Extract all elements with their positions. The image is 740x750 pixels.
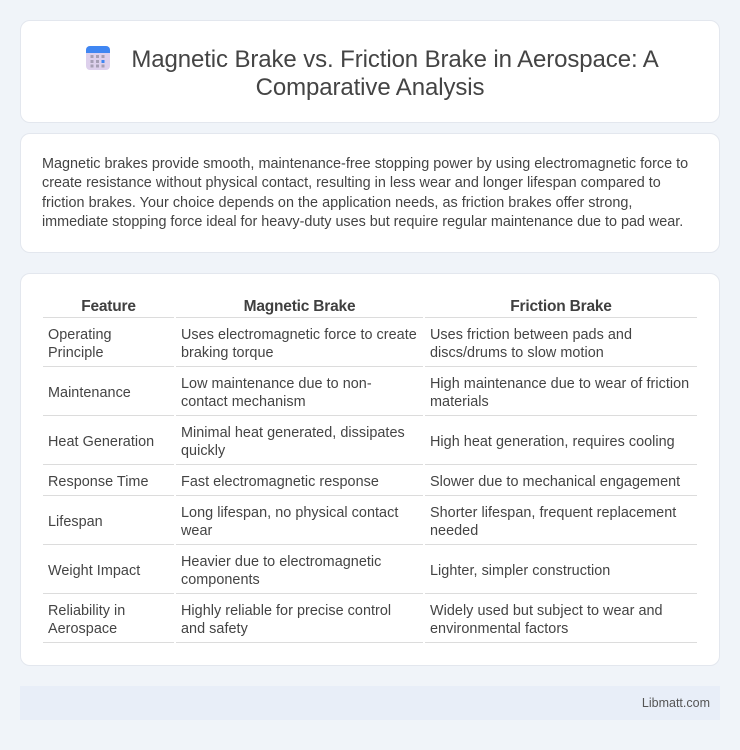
row: weight impact: Weight Impact xyxy=(48,563,140,579)
row: operating principle xyxy=(48,327,632,361)
row: reliability in aerospace: and safety xyxy=(181,621,248,637)
row: maintenance: contact mechanism xyxy=(181,394,306,410)
row: lifespan xyxy=(48,505,676,539)
intro paragraph: create resistance without physical contact, resulting in less wear and longer lifespan compared to xyxy=(42,175,661,191)
row: operating principle: Principle xyxy=(48,345,104,361)
table header: Friction Brake xyxy=(510,298,612,315)
row: operating principle: Uses friction between pads and xyxy=(430,327,632,343)
row: reliability in aerospace: environmental factors xyxy=(430,621,568,637)
row: maintenance: Low maintenance due to non- xyxy=(181,376,372,392)
table header xyxy=(81,298,612,315)
row: operating principle: discs/drums to slow motion xyxy=(430,345,604,361)
row: reliability in aerospace xyxy=(48,603,663,637)
row: reliability in aerospace: Reliability in xyxy=(48,603,125,619)
row: heat generation: quickly xyxy=(181,443,225,459)
row: maintenance: High maintenance due to wear of friction xyxy=(430,376,689,392)
row: reliability in aerospace: Highly reliable for precise control xyxy=(181,603,391,619)
row: response time: Response Time xyxy=(48,474,149,490)
row: maintenance xyxy=(48,376,689,410)
row: lifespan: Shorter lifespan, frequent replacement xyxy=(430,505,676,521)
table header: Feature xyxy=(81,298,136,315)
row: heat generation: Minimal heat generated, dissipates xyxy=(181,425,405,441)
title xyxy=(131,46,659,101)
intro paragraph: immediate stopping force ideal for heavy-duty uses but require regular maintenance due to pad wear. xyxy=(42,214,683,230)
row: lifespan: needed xyxy=(430,523,478,539)
row: heat generation xyxy=(48,425,675,459)
comparison table xyxy=(43,298,697,643)
row: response time: Fast electromagnetic response xyxy=(181,474,379,490)
intro paragraph: friction brakes. Your choice depends on the application needs, as friction brakes offer strong, xyxy=(42,195,632,211)
icon: calendar xyxy=(86,46,110,70)
row: response time xyxy=(48,474,680,490)
row: maintenance: Maintenance xyxy=(48,385,131,401)
intro paragraph xyxy=(42,156,688,230)
panel: title card xyxy=(20,20,720,123)
row: operating principle: braking torque xyxy=(181,345,274,361)
row: weight impact: Heavier due to electromagnetic xyxy=(181,554,381,570)
table header: Magnetic Brake xyxy=(244,298,355,315)
footer credit: Libmatt.com xyxy=(642,696,710,710)
title: Magnetic Brake vs. Friction Brake in Aerospace: A xyxy=(131,46,659,73)
title: Comparative Analysis xyxy=(256,74,484,101)
row: lifespan: wear xyxy=(181,523,212,539)
row: reliability in aerospace: Widely used but subject to wear and xyxy=(430,603,663,619)
row: maintenance: materials xyxy=(430,394,489,410)
row: response time: Slower due to mechanical engagement xyxy=(430,474,680,490)
row: weight impact: Lighter, simpler construction xyxy=(430,563,610,579)
footer bar xyxy=(20,686,720,720)
row: reliability in aerospace: Aerospace xyxy=(48,621,117,637)
intro paragraph: Magnetic brakes provide smooth, maintenance-free stopping power by using electromagnetic force to xyxy=(42,156,688,172)
row: heat generation: High heat generation, requires cooling xyxy=(430,434,675,450)
row: weight impact xyxy=(48,554,610,588)
row: weight impact: components xyxy=(181,572,260,588)
panel: introduction card xyxy=(20,133,720,253)
row: lifespan: Long lifespan, no physical contact xyxy=(181,505,398,521)
panel: comparison table card xyxy=(20,273,720,666)
row: heat generation: Heat Generation xyxy=(48,434,154,450)
row: operating principle: Uses electromagnetic force to create xyxy=(181,327,417,343)
row: lifespan: Lifespan xyxy=(48,514,103,530)
row: operating principle: Operating xyxy=(48,327,112,343)
